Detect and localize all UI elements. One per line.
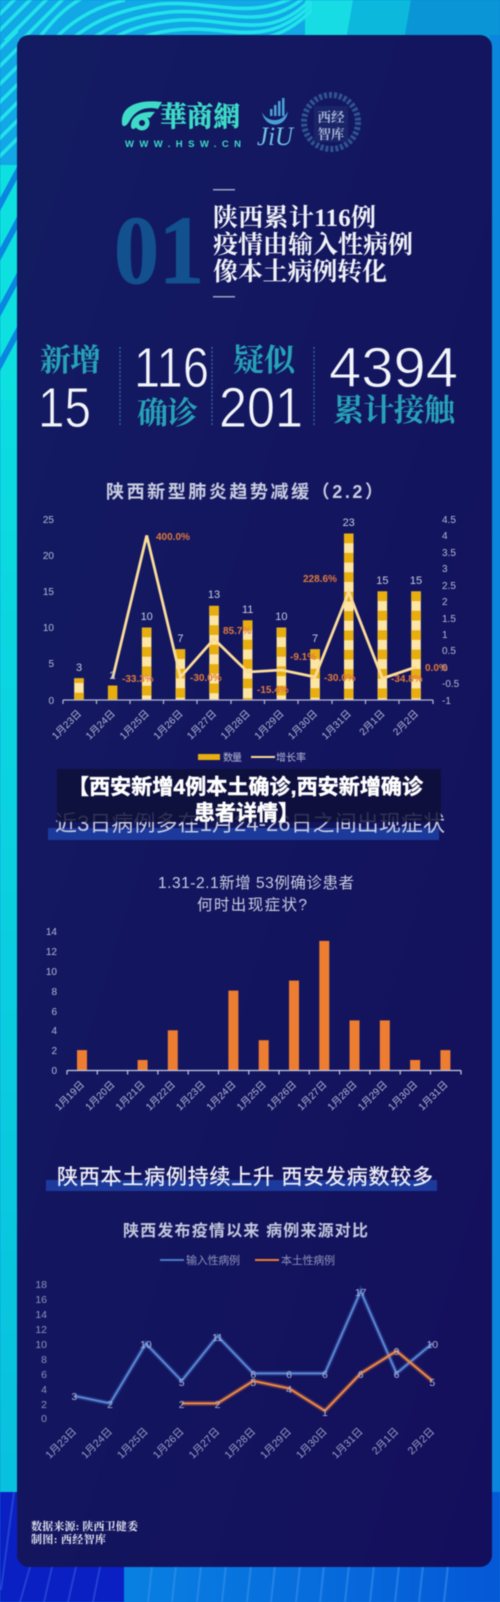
heading number: 01 <box>114 197 204 304</box>
heading block 01 <box>114 189 413 304</box>
count labels: 13 <box>208 589 220 601</box>
imported labels: 6 <box>250 1369 256 1381</box>
legend: case sources: 本土性病例 <box>281 1253 335 1267</box>
x axis labels: 1月24日 <box>83 708 118 742</box>
growth labels: 85.7% <box>223 626 251 637</box>
right axis labels: 3 <box>442 564 448 575</box>
logo: hsw url: WWW.HSW.CN <box>125 139 241 150</box>
local labels: 9 <box>394 1346 400 1358</box>
section band: symptoms <box>48 828 439 840</box>
left axis labels: 5 <box>48 659 54 670</box>
x axis labels: 1月26日 <box>265 1079 299 1113</box>
imported labels: 10 <box>140 1339 152 1351</box>
heading text: 陕西累计116例 <box>213 204 376 232</box>
y axis labels <box>46 927 57 1077</box>
count labels: 7 <box>177 633 183 645</box>
count labels: 15 <box>376 575 389 587</box>
local labels: 6 <box>358 1369 364 1381</box>
chart title: symptom onset: 何时出现症状? <box>197 896 307 914</box>
bars <box>74 534 421 700</box>
x axis labels: 1月25日 <box>117 708 152 742</box>
right axis labels: -0.5 <box>442 679 460 690</box>
y axis labels: 0 <box>41 1413 47 1425</box>
combo chart: count bars and growth line <box>43 515 460 764</box>
x axis labels: 1月24日 <box>204 1079 239 1113</box>
chart title: symptom onset: 1.31-2.1新增 53例确诊患者 <box>158 874 354 892</box>
stat: contacts: 4394 <box>329 336 458 400</box>
logos <box>122 95 358 151</box>
y axis labels: 8 <box>51 987 57 998</box>
x axis labels: 1月29日 <box>252 708 287 742</box>
count labels: 15 <box>410 575 422 587</box>
y axis labels: 12 <box>35 1324 47 1336</box>
imported labels: 11 <box>212 1332 223 1344</box>
right axis labels: 4 <box>442 531 448 542</box>
y axis labels: 10 <box>46 967 57 978</box>
logo: xijing think tank: 西经 <box>318 110 345 125</box>
right axis labels <box>442 515 460 707</box>
stat: new cases <box>38 343 101 440</box>
x axis labels: 1月31日 <box>319 708 354 742</box>
stats row <box>38 336 458 440</box>
y axis labels: 6 <box>51 1007 57 1018</box>
x axis <box>67 1070 461 1074</box>
stat: confirmed <box>134 336 209 431</box>
x axis labels: 1月28日 <box>218 708 253 742</box>
y axis labels: 4 <box>41 1384 47 1396</box>
y axis labels: 14 <box>35 1309 47 1321</box>
imported labels: 6 <box>286 1369 292 1381</box>
growth labels: -30.0% <box>190 673 222 684</box>
growth labels: -30.0% <box>324 673 356 684</box>
right axis labels: 2.5 <box>442 581 456 592</box>
growth labels <box>122 532 448 696</box>
y axis labels: 10 <box>35 1339 47 1351</box>
growth labels: -15.4% <box>257 685 289 696</box>
x axis labels: 1月27日 <box>185 708 219 742</box>
heading text: 像本土病例转化 <box>213 257 387 286</box>
x axis labels: 1月26日 <box>151 708 186 742</box>
logo: xijing think tank: 智库 <box>318 126 345 142</box>
local labels: 5 <box>429 1377 435 1389</box>
growth labels: -33.3% <box>122 674 154 685</box>
x axis labels: 1月19日 <box>53 1079 87 1113</box>
count labels <box>76 517 422 682</box>
left axis labels: 25 <box>43 515 54 526</box>
growth labels: 400.0% <box>156 532 190 543</box>
chart title: case sources: 陕西发布疫情以来 病例来源对比 <box>123 1221 368 1240</box>
growth labels: -34.8% <box>391 674 423 685</box>
local labels: 1 <box>322 1407 328 1419</box>
caption overlay: 患者详情】 <box>194 802 299 825</box>
x axis labels: 1月27日 <box>187 1426 222 1461</box>
imported labels: 6 <box>322 1369 328 1381</box>
y axis labels: 4 <box>51 1026 57 1037</box>
left axis labels: 0 <box>48 696 54 707</box>
heading text <box>213 204 413 286</box>
right axis labels: 2 <box>442 597 448 608</box>
growth labels: 228.6% <box>303 574 337 585</box>
logo: xijing think tank <box>304 95 358 149</box>
stat: suspected: 201 <box>219 376 303 440</box>
y axis labels: 2 <box>51 1046 57 1057</box>
imported cases line <box>74 1291 432 1403</box>
count labels: 3 <box>76 662 82 674</box>
section heading: local cases: 陕西本土病例持续上升 西安发病数较多 <box>57 1166 433 1189</box>
line chart: case sources <box>35 1279 438 1461</box>
growth labels: -9.1% <box>290 652 316 663</box>
x axis labels: 1月27日 <box>295 1079 329 1113</box>
count labels: 7 <box>312 633 318 645</box>
y axis labels: 18 <box>35 1279 47 1291</box>
right axis labels: -1 <box>442 696 451 707</box>
imported labels: 3 <box>71 1391 77 1403</box>
logo: hsw eye icon <box>122 101 162 130</box>
right axis labels: 1.5 <box>442 614 456 625</box>
local labels: 2 <box>179 1399 185 1411</box>
local labels: 2 <box>215 1399 221 1411</box>
y axis labels <box>35 1279 47 1425</box>
y axis labels: 16 <box>35 1294 47 1306</box>
growth labels: 0.0% <box>425 663 448 674</box>
footer source text: 制图: 西经智库 <box>31 1532 106 1546</box>
x axis labels: 1月21日 <box>113 1079 148 1113</box>
heading text: 疫情由输入性病例 <box>213 230 413 259</box>
legend: case sources <box>160 1253 335 1267</box>
x axis labels: 2月2日 <box>391 708 421 738</box>
y axis labels: 8 <box>41 1354 47 1366</box>
count labels: 10 <box>141 611 153 623</box>
imported labels: 17 <box>355 1287 367 1299</box>
imported labels: 5 <box>179 1377 185 1389</box>
caption overlay <box>57 769 441 825</box>
legend: case sources: 输入性病例 <box>186 1253 240 1267</box>
stat: new cases: 15 <box>38 376 91 440</box>
local labels: 5 <box>250 1377 256 1389</box>
right axis labels: 1 <box>442 630 448 641</box>
legend: 数量 <box>223 751 242 764</box>
count labels: 2 <box>110 670 116 682</box>
growth line <box>113 536 416 678</box>
stat: contacts <box>329 336 458 428</box>
imported labels <box>71 1287 438 1411</box>
bars <box>77 941 450 1070</box>
x axis labels: 1月20日 <box>83 1079 117 1113</box>
left axis labels: 20 <box>43 551 54 562</box>
x axis labels: 1月26日 <box>151 1426 187 1461</box>
stat: suspected <box>219 343 303 440</box>
y axis labels: 12 <box>46 947 57 958</box>
local cases line <box>182 1351 432 1411</box>
x axis labels: 1月31日 <box>416 1079 451 1113</box>
x axis labels: 1月28日 <box>222 1426 258 1461</box>
x axis labels: 2月2日 <box>406 1426 437 1457</box>
right axis labels: 4.5 <box>442 515 456 526</box>
left axis labels: 10 <box>43 623 54 634</box>
right axis labels: 0 <box>442 663 448 674</box>
legend <box>198 751 306 764</box>
x axis labels: 1月31日 <box>330 1426 366 1461</box>
imported labels: 10 <box>426 1339 438 1351</box>
x axis labels: 1月23日 <box>43 1426 79 1461</box>
x axis labels: 1月22日 <box>143 1079 178 1113</box>
left axis labels <box>43 515 54 707</box>
x axis <box>63 700 433 704</box>
left axis labels: 15 <box>43 587 54 598</box>
footer source text: 数据来源: 陕西卫健委 <box>31 1519 139 1533</box>
stat: confirmed: 116 <box>134 336 209 400</box>
logo: hsw name: 華商網 <box>160 101 240 133</box>
x axis labels: 1月29日 <box>355 1079 390 1113</box>
stat: confirmed: 确诊 <box>137 396 198 431</box>
x axis labels: 2月1日 <box>370 1426 401 1457</box>
x axis labels: 1月25日 <box>234 1079 269 1113</box>
x axis labels: 1月30日 <box>294 1426 330 1461</box>
x axis labels <box>53 1079 451 1113</box>
x axis labels: 1月30日 <box>386 1079 420 1113</box>
local labels <box>179 1346 435 1419</box>
section heading: symptoms: 近3日病例多在1月24-26日之间出现症状 <box>55 811 445 836</box>
x axis labels <box>43 1426 437 1461</box>
logo: jiu text: JiU <box>257 122 295 151</box>
x axis labels: 1月29日 <box>258 1426 294 1461</box>
bar chart: symptom onset dates <box>46 927 461 1113</box>
x axis labels: 2月1日 <box>357 708 388 738</box>
logo: jiu bars <box>262 98 288 125</box>
right axis labels: 3.5 <box>442 548 456 559</box>
y axis labels: 2 <box>41 1399 47 1411</box>
right axis labels: 0.5 <box>442 646 456 657</box>
stat: suspected: 疑似 <box>233 343 297 378</box>
x axis labels <box>50 708 421 742</box>
count labels: 11 <box>242 604 253 616</box>
x axis labels: 1月28日 <box>325 1079 360 1113</box>
footer source text <box>31 1519 139 1546</box>
imported labels: 2 <box>107 1399 113 1411</box>
stat: new cases: 新增 <box>40 343 101 378</box>
y axis labels: 14 <box>46 927 57 938</box>
legend: 增长率 <box>276 751 306 764</box>
stat: contacts: 累计接触 <box>333 393 458 428</box>
x axis labels: 1月23日 <box>50 708 84 742</box>
count labels: 10 <box>275 611 288 623</box>
x axis labels: 1月25日 <box>115 1426 151 1461</box>
count labels: 23 <box>343 517 355 529</box>
x axis labels: 1月24日 <box>79 1426 115 1461</box>
chart title: symptom onset <box>158 874 354 914</box>
y axis labels: 0 <box>51 1066 57 1077</box>
x axis labels: 1月23日 <box>174 1079 208 1113</box>
imported labels: 6 <box>394 1369 400 1381</box>
y axis labels: 6 <box>41 1369 47 1381</box>
section band: local cases <box>46 1180 437 1191</box>
chart title: trend: 陕西新型肺炎趋势减缓（2.2） <box>106 481 383 502</box>
x axis labels: 1月30日 <box>286 708 320 742</box>
caption overlay: 【西安新增4例本土确诊,西安新增确诊 <box>68 775 424 799</box>
local labels: 4 <box>286 1384 292 1396</box>
